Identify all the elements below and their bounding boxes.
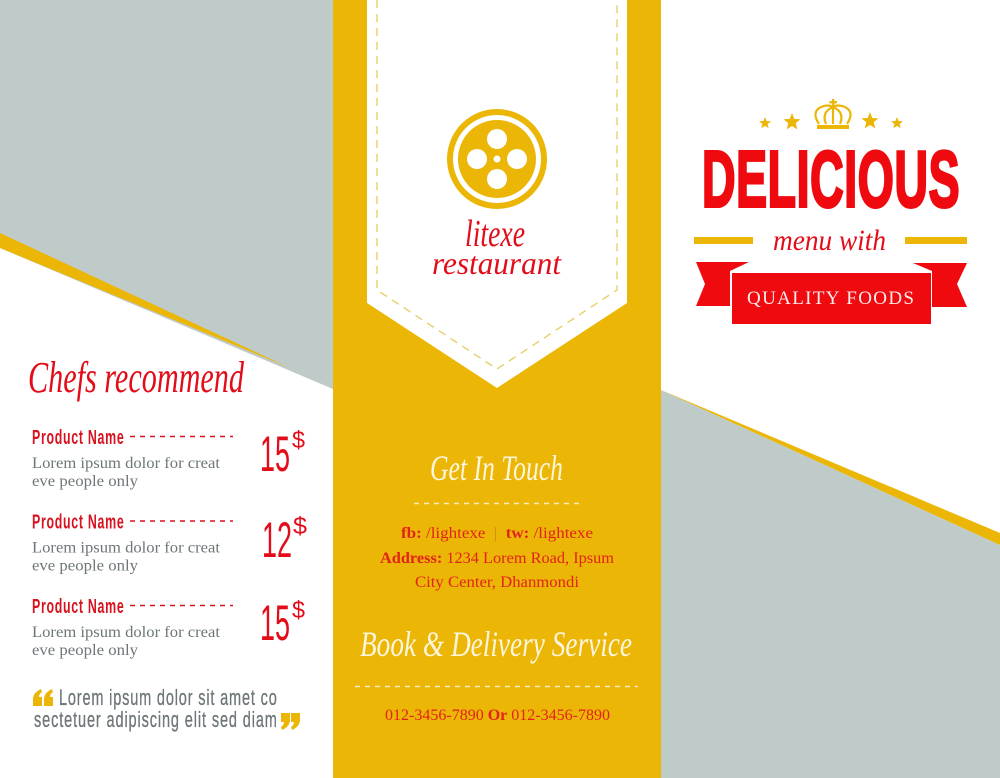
subtitle: menu with: menu with: [773, 224, 886, 257]
menu item 3: 15: [260, 595, 290, 651]
panel: center contact panel: [333, 0, 661, 778]
menu item 3: Lorem ipsum dolor for creat: [32, 624, 221, 641]
menu item 2: Lorem ipsum dolor for creat: [32, 540, 221, 556]
menu item 3: $: [292, 597, 305, 624]
menu item 1: Product Name: [32, 426, 124, 449]
icon: closing quote: [281, 713, 300, 730]
menu item 1: [32, 426, 305, 490]
icon: restaurant logo: [450, 112, 544, 206]
quote: sectetuer adipiscing elit sed diam: [34, 707, 277, 732]
phone numbers: 012-3456-7890 Or 012-3456-7890: [385, 707, 610, 724]
icon: opening quote: [33, 689, 53, 706]
menu item 3: eve people only: [32, 642, 138, 659]
white ribbon banner: [367, 0, 627, 388]
stitched ribbon border: [377, 0, 617, 369]
quote: [33, 685, 300, 732]
contact details: [380, 525, 615, 591]
panel: right title panel: [661, 0, 1000, 778]
icon: crown and stars: [759, 99, 903, 129]
quote: Lorem ipsum dolor sit amet co: [59, 685, 277, 710]
menu item 2: Product Name: [32, 510, 124, 533]
contact details: fb: /lightexe | tw: /lightexe: [401, 525, 593, 542]
contact details: City Center, Dhanmondi: [415, 574, 580, 591]
logo text: litexe: litexe: [465, 213, 525, 255]
menu item 3: Product Name: [32, 595, 124, 618]
contact details: Address: 1234 Lorem Road, Ipsum: [380, 550, 615, 567]
menu item 2: eve people only: [32, 558, 138, 574]
title: delicious: DELICIOUS: [702, 134, 960, 224]
menu item 1: $: [292, 427, 305, 454]
panel: left menu panel: [0, 0, 333, 778]
ribbon text: QUALITY FOODS: [747, 288, 914, 309]
logo text: restaurant: restaurant: [432, 245, 562, 281]
menu item 1: eve people only: [32, 473, 138, 490]
heading: chefs recommend: Chefs recommend: [28, 353, 245, 402]
red ribbon: [696, 262, 967, 324]
menu item 2: [32, 510, 307, 574]
menu item 2: 12: [262, 512, 292, 568]
menu item 1: Lorem ipsum dolor for creat: [32, 455, 221, 472]
menu item 3: [32, 595, 305, 659]
divider bars: [694, 237, 967, 244]
menu item 2: $: [293, 513, 307, 540]
heading: get in touch: Get In Touch: [430, 448, 563, 488]
menu item 1: 15: [260, 426, 290, 482]
heading: book and delivery service: Book & Delivery Service: [360, 624, 632, 664]
